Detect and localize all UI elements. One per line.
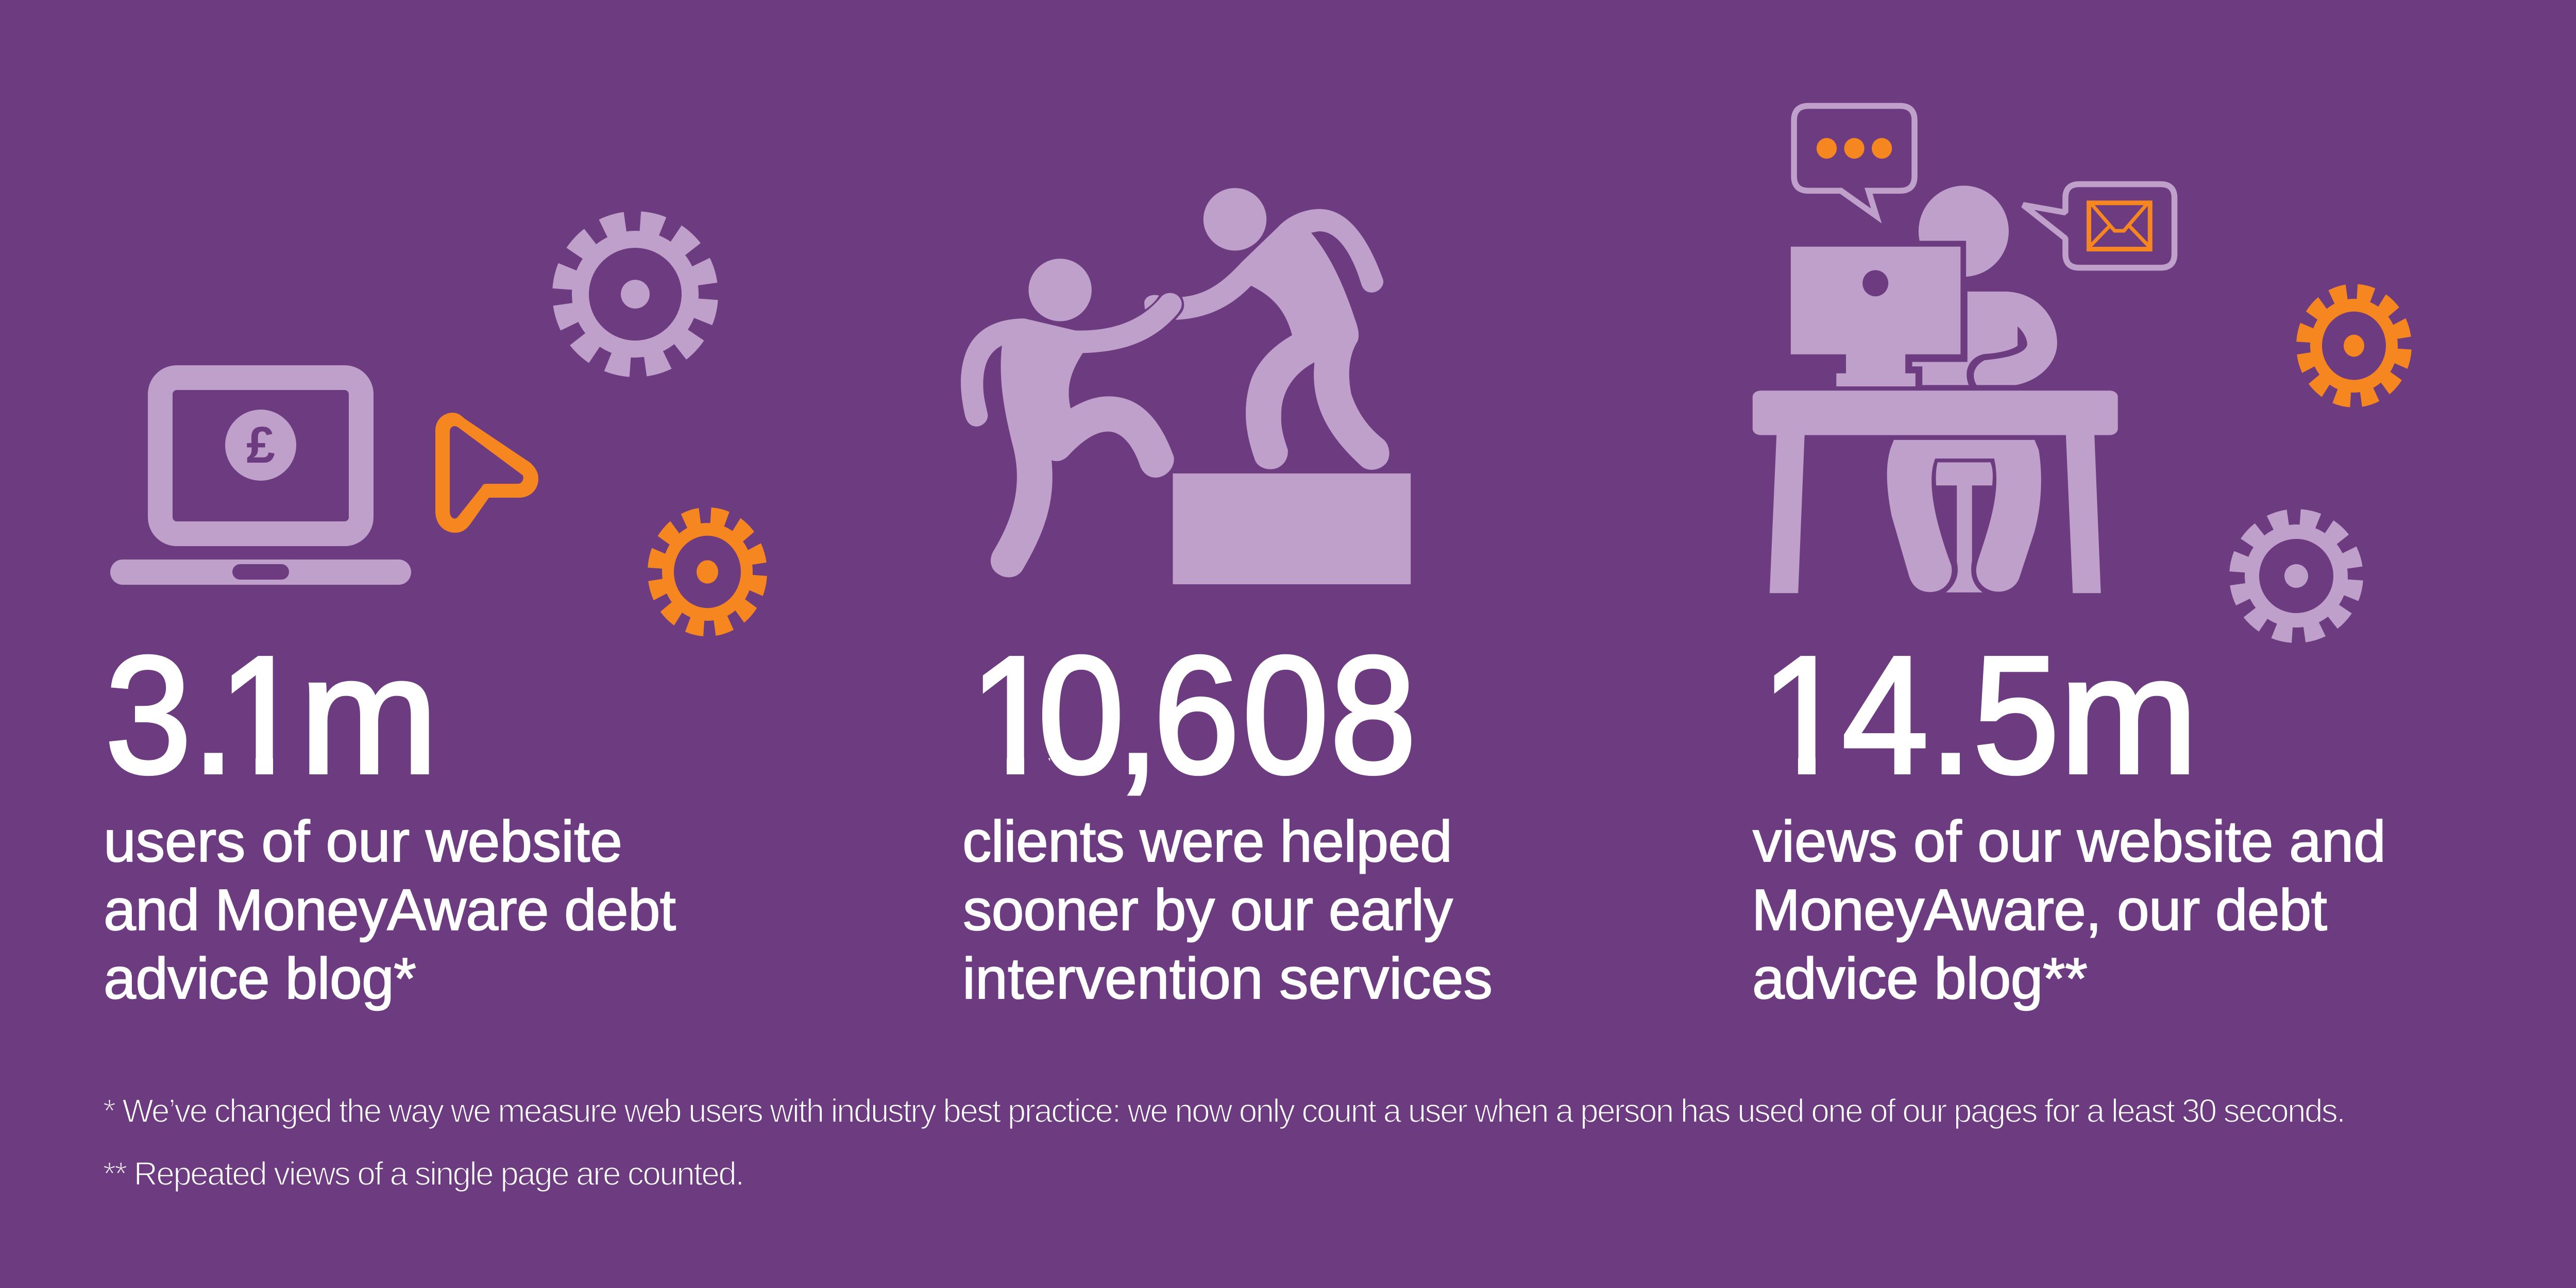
- description: website users: [104, 809, 676, 1011]
- description: clients helped: sooner by our early: [963, 877, 1453, 942]
- statistic: 3.1m: [109, 654, 429, 776]
- icon: speech bubble with envelope: [2023, 184, 2175, 268]
- icon: cursor arrow: [435, 413, 538, 533]
- infographic canvas: [104, 103, 2412, 1192]
- icon: speech bubble with dots: [1794, 106, 1914, 216]
- icon: person helping another up a step: [961, 188, 1411, 584]
- panel: website views: [1752, 106, 2408, 1011]
- description: clients helped: clients were helped: [962, 809, 1452, 874]
- description: website users: users of our website: [104, 809, 622, 874]
- panel: website users: [104, 217, 763, 1011]
- icon: orange gear: [652, 512, 763, 632]
- description: website views: advice blog**: [1752, 946, 2088, 1011]
- icon: laptop with pound sign: [110, 378, 411, 585]
- statistic: 14.5m: 14.5: [1761, 622, 2059, 808]
- description: website users: and MoneyAware debt: [104, 877, 676, 942]
- footnote: repeated views: ** Repeated views of a single page are counted.: [103, 1155, 744, 1192]
- description: website views: MoneyAware, our debt: [1752, 877, 2327, 942]
- description: website views: views of our website and: [1753, 809, 2386, 874]
- icon: laptop with pound sign: £: [246, 416, 275, 474]
- description: clients helped: [962, 809, 1493, 1011]
- statistic: 14.5m: [1774, 656, 2189, 776]
- icon: lilac gear: [558, 217, 712, 371]
- footnote: web user measurement: * We’ve changed the way we measure web users with industry best practice: we now only count a user when a person has used one of our pages for a least 30 seconds.: [103, 1092, 2346, 1129]
- description: website views: [1752, 809, 2386, 1011]
- description: clients helped: intervention services: [962, 946, 1493, 1011]
- panel: early intervention clients: [961, 188, 1493, 1011]
- description: website users: advice blog*: [104, 946, 416, 1011]
- icon: lilac gear: [2233, 513, 2359, 639]
- statistic: 3.1m: 3.1: [105, 622, 305, 808]
- statistic: 14.5m: m: [2060, 622, 2198, 808]
- icon: person at a desk with monitor: [1753, 185, 2118, 593]
- statistic: 3.1m: m: [300, 622, 438, 808]
- statistic: 10,608: 10,608: [970, 622, 1416, 808]
- icon: orange gear: [2300, 289, 2408, 403]
